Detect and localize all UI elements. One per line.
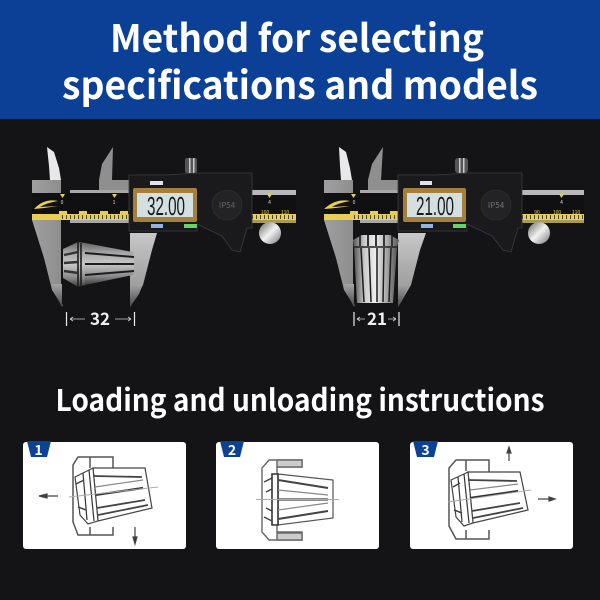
arrow up <box>507 447 511 461</box>
centre line <box>69 487 158 497</box>
badge 3 <box>413 440 438 460</box>
collet tilted <box>451 472 528 526</box>
collet, vertical <box>353 235 399 303</box>
right scale beam: 110 <box>281 209 289 216</box>
caliper 1: measuring collet length 32 <box>32 147 296 330</box>
panel: step 3 <box>410 440 573 549</box>
caliper 1: measuring collet length 32: 0 <box>61 199 64 206</box>
right scale beam: 90 <box>534 209 540 216</box>
IP54 seal <box>212 190 242 220</box>
badge 1 <box>27 440 51 460</box>
LCD display <box>403 188 466 222</box>
centre line <box>256 498 339 500</box>
caliper 2: measuring collet diameter 21 <box>324 147 584 330</box>
locking knob <box>528 222 550 244</box>
right scale beam <box>522 190 584 223</box>
collet, horizontal <box>63 242 134 287</box>
nut <box>262 460 302 540</box>
dimension 32: 32 <box>90 305 110 330</box>
section heading: Loading and unloading instructions <box>56 376 544 420</box>
centre line <box>448 490 531 502</box>
nut <box>449 460 489 539</box>
thumb wheel <box>455 158 468 173</box>
dimension 32 <box>66 305 134 330</box>
right scale beam: 100 <box>261 209 269 216</box>
badge 3: 3 <box>421 440 430 460</box>
badge 1: 1 <box>34 440 43 460</box>
badge 2 <box>220 440 244 460</box>
badge 2: 2 <box>228 440 236 460</box>
locking knob <box>259 222 281 244</box>
dimension 21: 21 <box>367 305 387 330</box>
slider body <box>129 173 252 252</box>
IP54 seal: IP54 <box>219 200 236 211</box>
buttons <box>420 181 466 228</box>
right scale beam: 110 <box>572 209 580 216</box>
arrow right <box>538 497 555 501</box>
LCD display: 21.00 <box>416 191 454 221</box>
panel: step 2 <box>216 440 379 549</box>
collet tilted <box>75 468 152 524</box>
right scale beam: 4 <box>560 199 563 206</box>
thumb wheel <box>185 158 197 173</box>
right scale beam: 4 <box>268 199 271 206</box>
LCD display <box>133 188 197 222</box>
nut <box>73 457 113 535</box>
collet straight <box>264 474 333 525</box>
slider body <box>398 173 522 252</box>
LCD display: 32.00 <box>147 191 185 221</box>
caliper 1: measuring collet length 32: 1 <box>113 199 116 206</box>
right scale beam <box>252 190 296 223</box>
IP54 seal <box>481 190 511 220</box>
arrow left <box>39 494 58 498</box>
header banner <box>0 0 600 119</box>
panel: step 1 <box>23 440 186 549</box>
title: Method for selecting <box>110 8 484 63</box>
IP54 seal: IP54 <box>488 200 505 211</box>
header banner: specifications and models <box>62 55 538 110</box>
right scale beam: 100 <box>553 209 561 216</box>
caliper 2: measuring collet diameter 21: 0 <box>353 199 356 206</box>
arrow down <box>133 527 137 544</box>
buttons <box>150 181 197 228</box>
dimension 21 <box>354 305 399 330</box>
